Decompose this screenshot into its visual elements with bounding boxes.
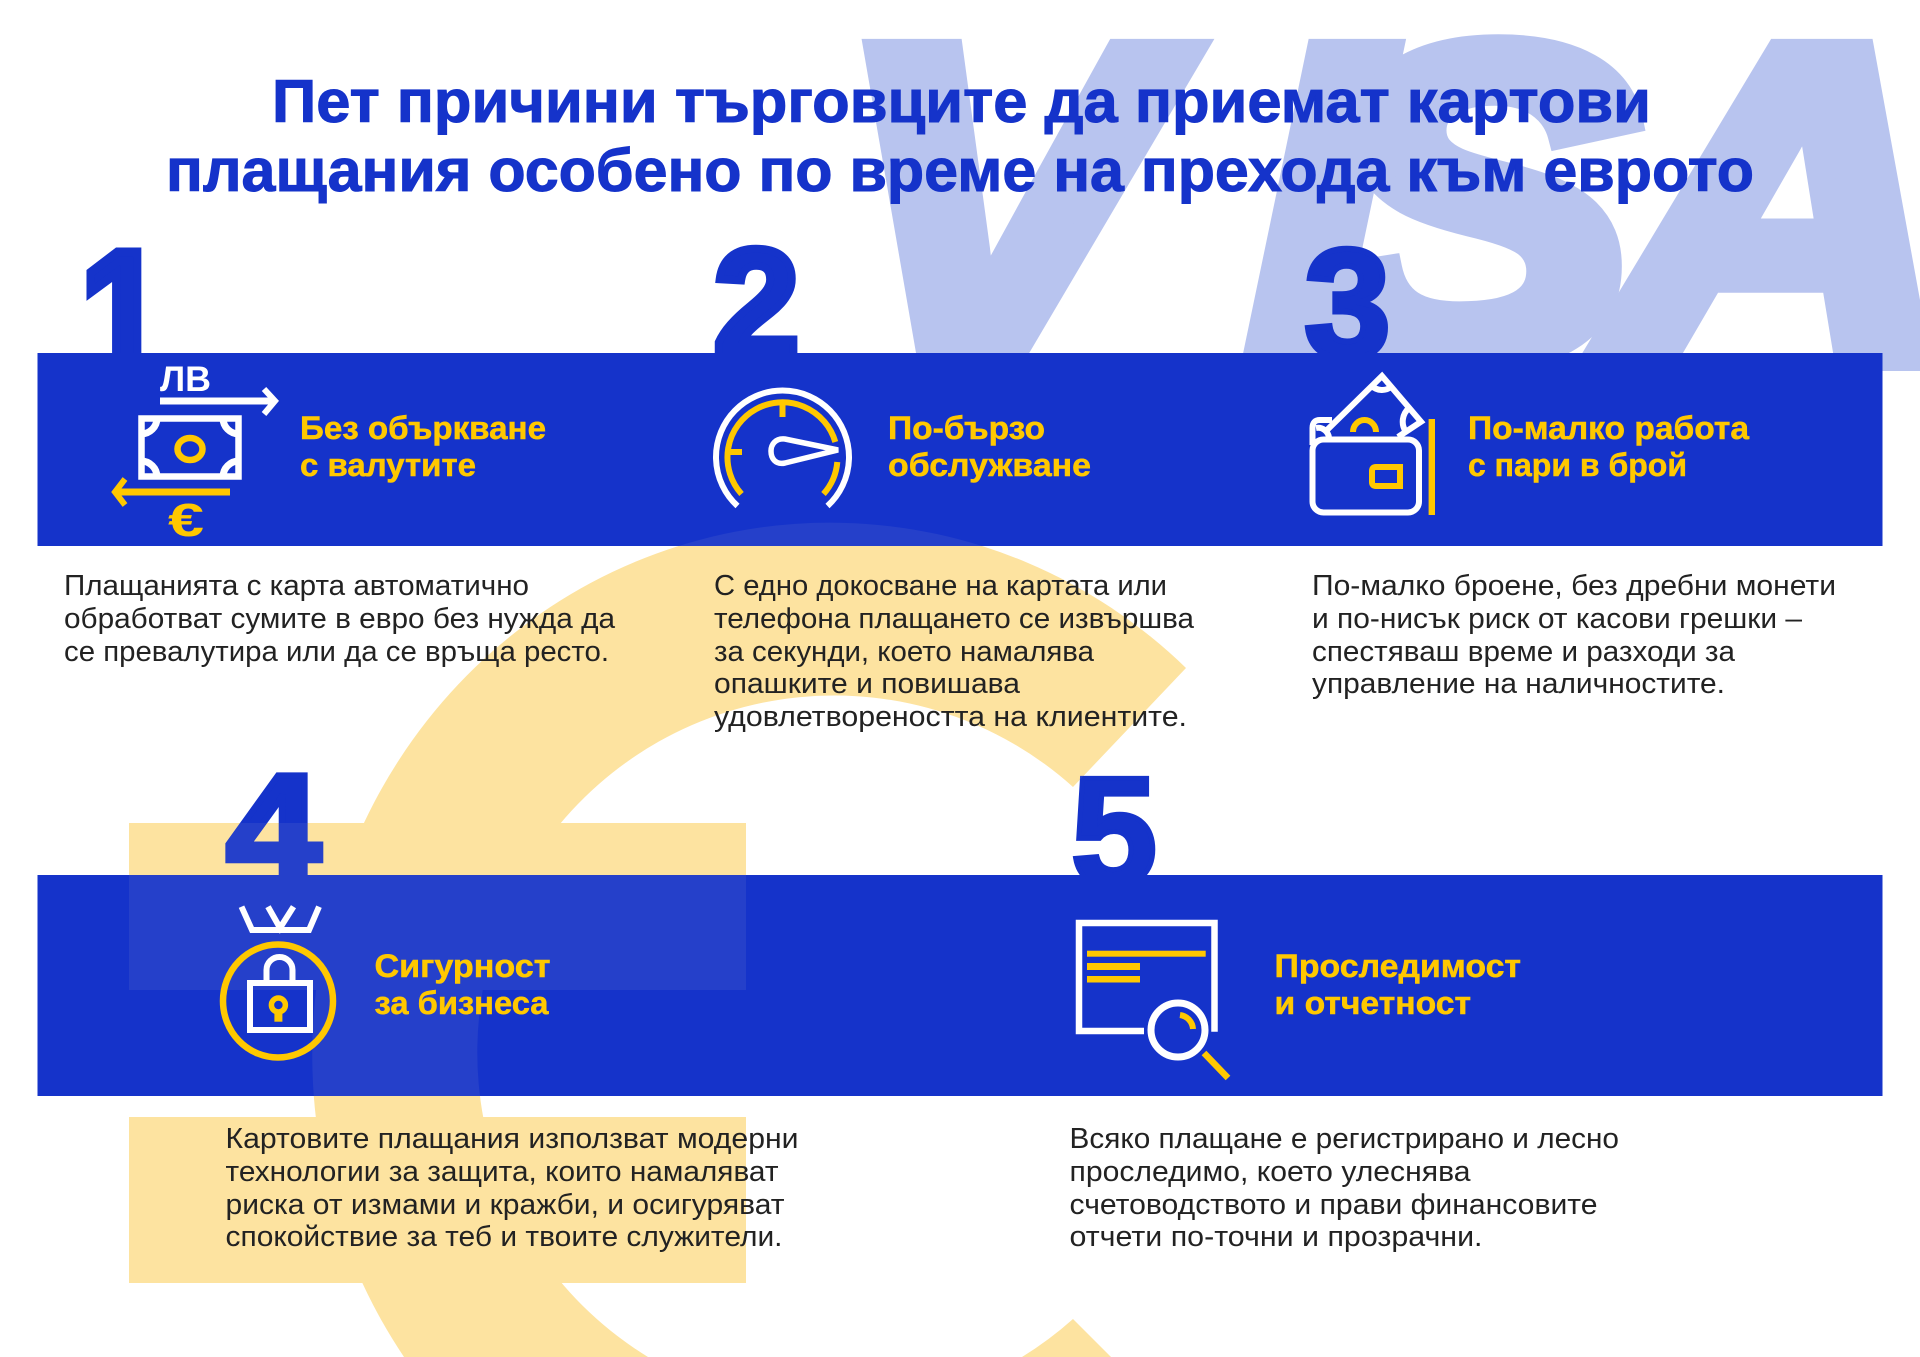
text block 1: Плащанията с карта автоматично (64, 570, 529, 602)
heading 2 (888, 410, 1091, 483)
text block 4: риска от измами и кражби, и осигуряват (226, 1189, 784, 1221)
number 1: 1 (80, 213, 166, 417)
heading 4: за бизнеса (374, 985, 549, 1021)
heading 3: По-малко работа (1468, 410, 1750, 446)
text block 5: отчети по-точни и прозрачни. (1070, 1221, 1482, 1253)
text block 2: телефона плащането се извършва (714, 603, 1194, 635)
text block 1: се превалутира или да се връща ресто. (64, 636, 609, 668)
text block 2: за секунди, което намалява (714, 636, 1094, 668)
text block 3: По-малко броене, без дребни монети (1312, 570, 1836, 602)
text block 5: счетоводството и прави финансовите (1070, 1189, 1598, 1221)
icon: security lock medal (223, 907, 333, 1058)
text block 4 (226, 1123, 798, 1253)
icon: currency exchange banknote: € (168, 494, 204, 546)
icon: currency exchange banknote (115, 360, 275, 546)
heading 3: с пари в брой (1468, 447, 1687, 483)
text block 2: С едно докосване на картата или (714, 570, 1167, 602)
text block 5: Всяко плащане е регистрирано и лесно (1070, 1123, 1619, 1155)
title (166, 68, 1754, 204)
text block 3: и по-нисък риск от касови грешки – (1312, 603, 1802, 635)
icon: document with magnifier (1079, 923, 1228, 1078)
title: плащания особено по време на прехода към еврото (166, 137, 1754, 204)
text block 2: удовлетвореността на клиентите. (714, 701, 1187, 733)
text block 3: спестяваш време и разходи за (1312, 636, 1735, 668)
text block 4: спокойствие за теб и твоите служители. (226, 1221, 782, 1253)
text block 5 (1070, 1123, 1619, 1253)
heading 4 (374, 948, 551, 1021)
icon: currency exchange banknote: ЛВ (160, 360, 211, 399)
text block 1: обработват сумите в евро без нужда да (64, 603, 615, 635)
top blue band (38, 353, 1882, 546)
background euro symbol (129, 523, 1186, 1357)
icon: wallet with banknote (1312, 376, 1435, 515)
heading 5: и отчетност (1274, 985, 1471, 1021)
text block 2: опашките и повишава (714, 668, 1020, 700)
title: Пет причини търговците да приемат картови (272, 68, 1651, 135)
text block 4: технологии за защита, които намаляват (226, 1156, 778, 1188)
text block 3 (1312, 570, 1836, 700)
heading 5: Проследимост (1274, 948, 1521, 984)
heading 2: По-бързо (888, 410, 1045, 446)
number 4: 4 (226, 742, 321, 915)
heading 1: Без объркване (300, 410, 546, 446)
heading 3 (1468, 410, 1750, 483)
heading 1: с валутите (300, 447, 476, 483)
heading 2: обслужване (888, 447, 1091, 483)
number 2: 2 (713, 217, 800, 390)
heading 5 (1274, 948, 1521, 1021)
text block 1 (64, 570, 615, 668)
text block 5: проследимо, което улеснява (1070, 1156, 1471, 1188)
text block 4: Картовите плащания използват модерни (226, 1123, 798, 1155)
heading 1 (300, 410, 546, 483)
number 5: 5 (1071, 745, 1157, 918)
heading 4: Сигурност (374, 948, 551, 984)
icon: speedometer (716, 391, 849, 506)
text block 2 (714, 570, 1194, 733)
number 3: 3 (1304, 217, 1391, 390)
text block 3: управление на наличностите. (1312, 668, 1725, 700)
bottom blue band (38, 875, 1882, 1096)
